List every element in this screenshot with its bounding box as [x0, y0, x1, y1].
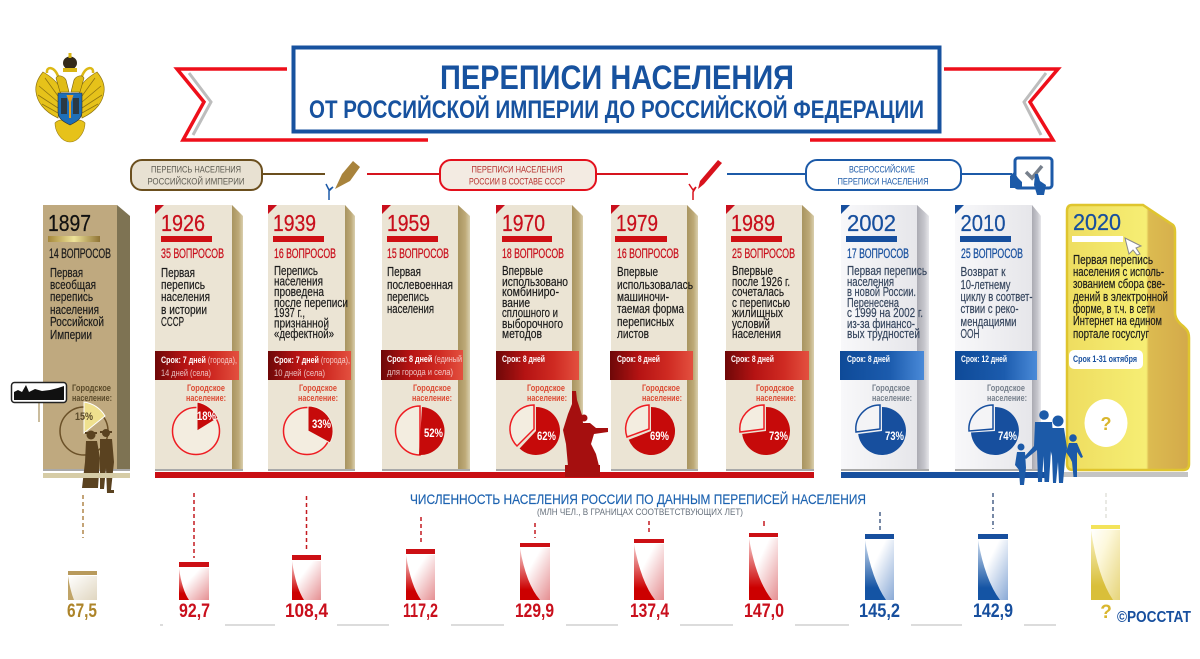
description: использовано: [502, 275, 568, 289]
duration band: Срок: 8 дней: [847, 354, 890, 365]
urban population pie 73%: 73%: [769, 429, 788, 443]
description: форме, в т.ч. в сети: [1073, 302, 1155, 316]
description: [387, 265, 453, 316]
description: населения: [847, 275, 894, 289]
panel: 1970: [496, 205, 583, 471]
question count: 25 ВОПРОСОВ: [961, 246, 1023, 261]
era label: Russian Empire: РОССИЙСКОЙ ИМПЕРИИ: [148, 176, 244, 186]
title box: [294, 48, 940, 132]
bar 1979: [630, 521, 669, 622]
urban label: Городское: [756, 383, 794, 394]
right ribbon shadow: [1024, 73, 1046, 135]
silhouette: couple: [82, 429, 114, 493]
description: СССР: [161, 315, 184, 329]
urban population pie 73%: 73%: [885, 429, 904, 443]
base: [43, 473, 130, 478]
description: листов: [617, 327, 649, 341]
duration band: [610, 351, 693, 380]
description: Интернет на едином: [1073, 314, 1162, 328]
year: 1979: [616, 210, 658, 236]
timeline base red: [155, 472, 814, 478]
bar 1970: 129,9: [515, 601, 554, 622]
duration band: [381, 350, 463, 380]
urban label: Городское: [987, 383, 1025, 394]
blue bar: [846, 236, 897, 242]
urban population pie 52%: 52%: [424, 426, 443, 440]
left ribbon: [177, 69, 428, 140]
description: населения: [50, 303, 99, 317]
bar 2020: [1091, 493, 1120, 623]
urban population pie 15%: [60, 402, 108, 455]
description: Первая: [161, 266, 195, 280]
year: 1926: [161, 210, 205, 236]
description: [161, 266, 210, 329]
coat of arms emblem: [36, 53, 104, 142]
description: 1937 г.,: [274, 306, 305, 320]
icon: red pencil: [689, 160, 722, 200]
urban label: население:: [72, 393, 112, 404]
description: населения: [274, 274, 323, 288]
question count: 25 ВОПРОСОВ: [732, 246, 795, 261]
urban label: Городское: [72, 383, 111, 394]
panel: 2010: [955, 205, 1041, 471]
description: вание: [502, 296, 530, 310]
duration band: Срок: 8 дней: [502, 354, 545, 365]
question count: 16 ВОПРОСОВ: [617, 246, 679, 261]
description: Впервые: [617, 265, 658, 279]
description: после переписи: [274, 296, 348, 310]
year: 1939: [273, 210, 316, 236]
bar 1926: [179, 493, 210, 622]
duration band: Срок: 8 дней: [731, 354, 774, 365]
description: вых трудностей: [847, 327, 920, 341]
urban population pie 33%: 33%: [312, 417, 331, 431]
urban population pie 18%: [172, 402, 220, 454]
duration band: [840, 351, 924, 380]
bar 1959: 117,2: [403, 601, 438, 622]
year: 1970: [502, 210, 545, 236]
icon: town sign: [12, 382, 66, 422]
card: [382, 205, 470, 471]
description: признанной: [274, 316, 329, 330]
panel: 1959: [381, 205, 470, 471]
bar 1897: 67,5: [67, 601, 97, 622]
urban population pie 18%: 18%: [197, 409, 216, 423]
description: Первая: [387, 265, 421, 279]
description: Перепись: [274, 264, 318, 278]
left ribbon shadow: [189, 73, 211, 135]
panel: 1926: [155, 205, 243, 471]
era label: All-Russia: ПЕРЕПИСИ НАСЕЛЕНИЯ: [838, 176, 928, 186]
duration band: Срок: 8 дней (единый: [387, 354, 462, 365]
title: ПЕРЕПИСИ НАСЕЛЕНИЯ: [440, 59, 794, 97]
description: [274, 264, 348, 341]
urban label: население:: [872, 393, 912, 404]
duration pill: Срок 1-31 октября: [1073, 354, 1137, 364]
year: 1897: [48, 210, 91, 236]
urban population pie 73%: [740, 405, 790, 455]
duration pill: [1069, 350, 1143, 369]
description: портале госуслуг: [1073, 327, 1149, 341]
description: выборочного: [502, 317, 563, 331]
urban label: [527, 383, 567, 404]
red bar: [731, 236, 782, 242]
timeline base grey: [1063, 472, 1188, 477]
description: Возврат к: [960, 265, 1006, 279]
red bar: [273, 236, 324, 242]
year: 2010: [960, 210, 1006, 236]
description: «дефектной»: [274, 327, 334, 341]
year: 2020: [1073, 209, 1121, 235]
unknown urban share: ?: [1100, 414, 1112, 434]
urban label: Городское: [642, 383, 680, 394]
urban label: [756, 383, 796, 404]
panel: 1897: [12, 205, 130, 493]
question count: 17 ВОПРОСОВ: [847, 246, 909, 261]
white bar: [1072, 236, 1123, 242]
description: [50, 266, 104, 342]
chart subheading: (МЛН ЧЕЛ., В ГРАНИЦАХ СООТВЕТСТВУЮЩИХ ЛЕТ): [537, 507, 743, 517]
urban label: население:: [756, 393, 796, 404]
timeline base blue: [841, 472, 1045, 478]
urban label: население:: [298, 393, 338, 404]
year: 2002: [847, 210, 896, 236]
red bar: [502, 236, 552, 242]
duration band: [155, 351, 239, 380]
bar 1989: 147,0: [744, 601, 784, 622]
card: [955, 205, 1041, 471]
panel: 2020: [1067, 205, 1189, 470]
duration band: [268, 351, 351, 380]
urban label: Городское: [187, 383, 225, 394]
description: проведена: [274, 285, 324, 299]
description: Впервые: [732, 264, 773, 278]
urban label: население:: [527, 393, 567, 404]
urban population pie 62%: [510, 405, 560, 455]
urban label: население:: [987, 393, 1027, 404]
urban label: Городское: [872, 383, 910, 394]
description: с 1999 на 2002 г.: [847, 306, 923, 320]
baseline rules: [160, 624, 1056, 626]
bar 1939: 108,4: [285, 601, 328, 622]
urban label: население:: [642, 393, 682, 404]
subtitle: ОТ РОССИЙСКОЙ ИМПЕРИИ ДО РОССИЙСКОЙ ФЕДЕРАЦИИ: [309, 94, 924, 124]
bar 1989: [744, 521, 784, 622]
bar chart: population: [67, 493, 1120, 623]
description: сплошного и: [502, 306, 558, 320]
duration band: [955, 351, 1037, 380]
urban population pie 74%: [969, 405, 1019, 455]
red bar: [615, 236, 667, 242]
duration band: [725, 351, 809, 380]
card: [268, 205, 355, 471]
urban label: [186, 383, 226, 404]
era label: All-Russia: [727, 160, 1012, 190]
bar 1926: 92,7: [179, 601, 210, 622]
icon: tablet with check mark: [1010, 158, 1052, 195]
red bar: [387, 236, 438, 242]
bar 2010: 142,9: [973, 601, 1013, 622]
urban label: [872, 383, 912, 404]
urban label: [642, 383, 682, 404]
bar 2002: 145,2: [859, 601, 900, 622]
era label: All-Russia: ВСЕРОССИЙСКИЕ: [849, 164, 915, 174]
description: Империи: [50, 328, 92, 342]
description: 10-летнему: [960, 278, 1011, 292]
era label: USSR: ПЕРЕПИСИ НАСЕЛЕНИЯ: [472, 164, 562, 174]
description: послевоенная: [387, 278, 453, 292]
description: зованием сбора све-: [1073, 277, 1165, 291]
description: [502, 264, 568, 341]
card: [496, 205, 583, 471]
description: Впервые: [502, 264, 543, 278]
description: комбиниро-: [502, 285, 559, 299]
urban population pie 33%: [284, 406, 333, 454]
description: использовалась: [617, 278, 693, 292]
icon: cursor: [1125, 238, 1141, 255]
description: таемая форма: [617, 302, 684, 316]
urban label: Городское: [527, 383, 565, 394]
bar 2020: ?: [1100, 602, 1112, 623]
urban label: [72, 383, 112, 404]
bar 2002: [859, 512, 900, 622]
description: [847, 264, 927, 341]
description: с переписью: [732, 296, 790, 310]
description: дений в электронной: [1073, 290, 1168, 304]
description: сочеталась: [732, 285, 784, 299]
description: ООН: [960, 327, 980, 341]
card: [611, 205, 698, 471]
question count: 16 ВОПРОСОВ: [274, 246, 336, 261]
duration band: 10 дней (села): [274, 368, 325, 379]
blue bar: [960, 236, 1011, 242]
urban population pie 73%: [856, 405, 906, 455]
description: Первая перепись: [847, 264, 927, 278]
description: перепись: [50, 290, 93, 304]
urban label: население:: [186, 393, 226, 404]
urban label: [412, 383, 452, 404]
urban population pie 62%: 62%: [537, 429, 556, 443]
description: населения: [732, 327, 781, 341]
panel: 1939: [268, 205, 355, 471]
duration band: 14 дней (села): [161, 368, 211, 379]
urban population pie 74%: 74%: [998, 429, 1017, 443]
gold bar: [48, 236, 100, 242]
duration band: [496, 351, 579, 380]
description: перепись: [387, 290, 429, 304]
description: в истории: [161, 303, 207, 317]
urban population pie 69%: 69%: [650, 429, 669, 443]
bar 1939: [285, 496, 328, 622]
icon: fountain pen: [326, 161, 360, 200]
description: из-за финансо-: [847, 317, 915, 331]
card: [1067, 205, 1189, 470]
description: циклу в соответ-: [960, 290, 1032, 304]
urban label: население:: [412, 393, 452, 404]
year: 1989: [731, 210, 775, 236]
description: населения: [161, 290, 210, 304]
duration band: Срок: 7 дней (города),: [161, 355, 237, 366]
era label: Russian Empire: ПЕРЕПИСЬ НАСЕЛЕНИЯ: [151, 164, 241, 174]
urban label: [987, 383, 1027, 404]
description: в новой России.: [847, 285, 916, 299]
description: машиночи-: [617, 290, 669, 304]
card: [43, 205, 130, 471]
panel: 2002: [840, 205, 929, 471]
silhouette: monument: [563, 391, 608, 477]
description: после 1926 г.: [732, 275, 790, 289]
bar 1959: [403, 517, 438, 622]
description: методов: [502, 327, 542, 341]
era label: USSR: [367, 160, 688, 190]
description: населения: [387, 302, 434, 316]
bar 1970: [515, 523, 554, 622]
question count: 18 ВОПРОСОВ: [502, 246, 564, 261]
description: ствии с реко-: [960, 302, 1018, 316]
year: 1959: [387, 210, 430, 236]
description: жилищных: [732, 306, 784, 320]
duration band: для города и села): [387, 367, 453, 378]
description: Первая перепись: [1073, 253, 1153, 267]
urban label: Городское: [299, 383, 337, 394]
description: [617, 265, 693, 341]
right ribbon: [810, 69, 1058, 140]
urban label: [298, 383, 338, 404]
chart heading: ЧИСЛЕННОСТЬ НАСЕЛЕНИЯ РОССИИ ПО ДАННЫМ ПЕРЕПИСЕЙ НАСЕЛЕНИЯ: [410, 490, 866, 507]
description: населения с исполь-: [1073, 265, 1164, 279]
urban label: Городское: [413, 383, 451, 394]
era label: USSR: РОССИИ В СОСТАВЕ СССР: [469, 176, 565, 186]
urban population pie 52%: [396, 406, 445, 455]
panel: 1979: [610, 205, 698, 471]
duration band: Срок: 12 дней: [961, 354, 1007, 365]
red bar: [161, 236, 212, 242]
description: условий: [732, 317, 770, 331]
bar 1979: 137,4: [630, 601, 669, 622]
urban population pie 69%: [626, 405, 675, 455]
description: переписных: [617, 315, 675, 329]
question count: 35 ВОПРОСОВ: [161, 246, 224, 261]
description: мендациями: [960, 315, 1017, 329]
credit: ©РОССТАТ: [1117, 609, 1191, 626]
silhouette: family: [1015, 410, 1083, 485]
bar 1897: [67, 495, 97, 622]
unknown urban share: [1084, 399, 1128, 447]
duration band: Срок: 8 дней: [617, 354, 660, 365]
panel: 1989: [725, 205, 814, 471]
card: [155, 205, 243, 471]
card: [841, 205, 929, 471]
card: [726, 205, 814, 471]
description: [1073, 253, 1168, 341]
duration band: Срок: 7 дней (города),: [274, 355, 350, 366]
question count: 14 ВОПРОСОВ: [49, 246, 111, 261]
description: перепись: [161, 278, 205, 292]
question count: 15 ВОПРОСОВ: [387, 246, 449, 261]
description: Перенесена: [847, 296, 899, 310]
bar 2010: [973, 493, 1013, 622]
description: всеобщая: [50, 278, 96, 292]
era label: Russian Empire: [131, 160, 325, 190]
description: [732, 264, 790, 341]
description: Российской: [50, 315, 104, 329]
description: [960, 265, 1032, 341]
urban population pie 15%: 15%: [75, 411, 93, 423]
description: Первая: [50, 266, 83, 280]
